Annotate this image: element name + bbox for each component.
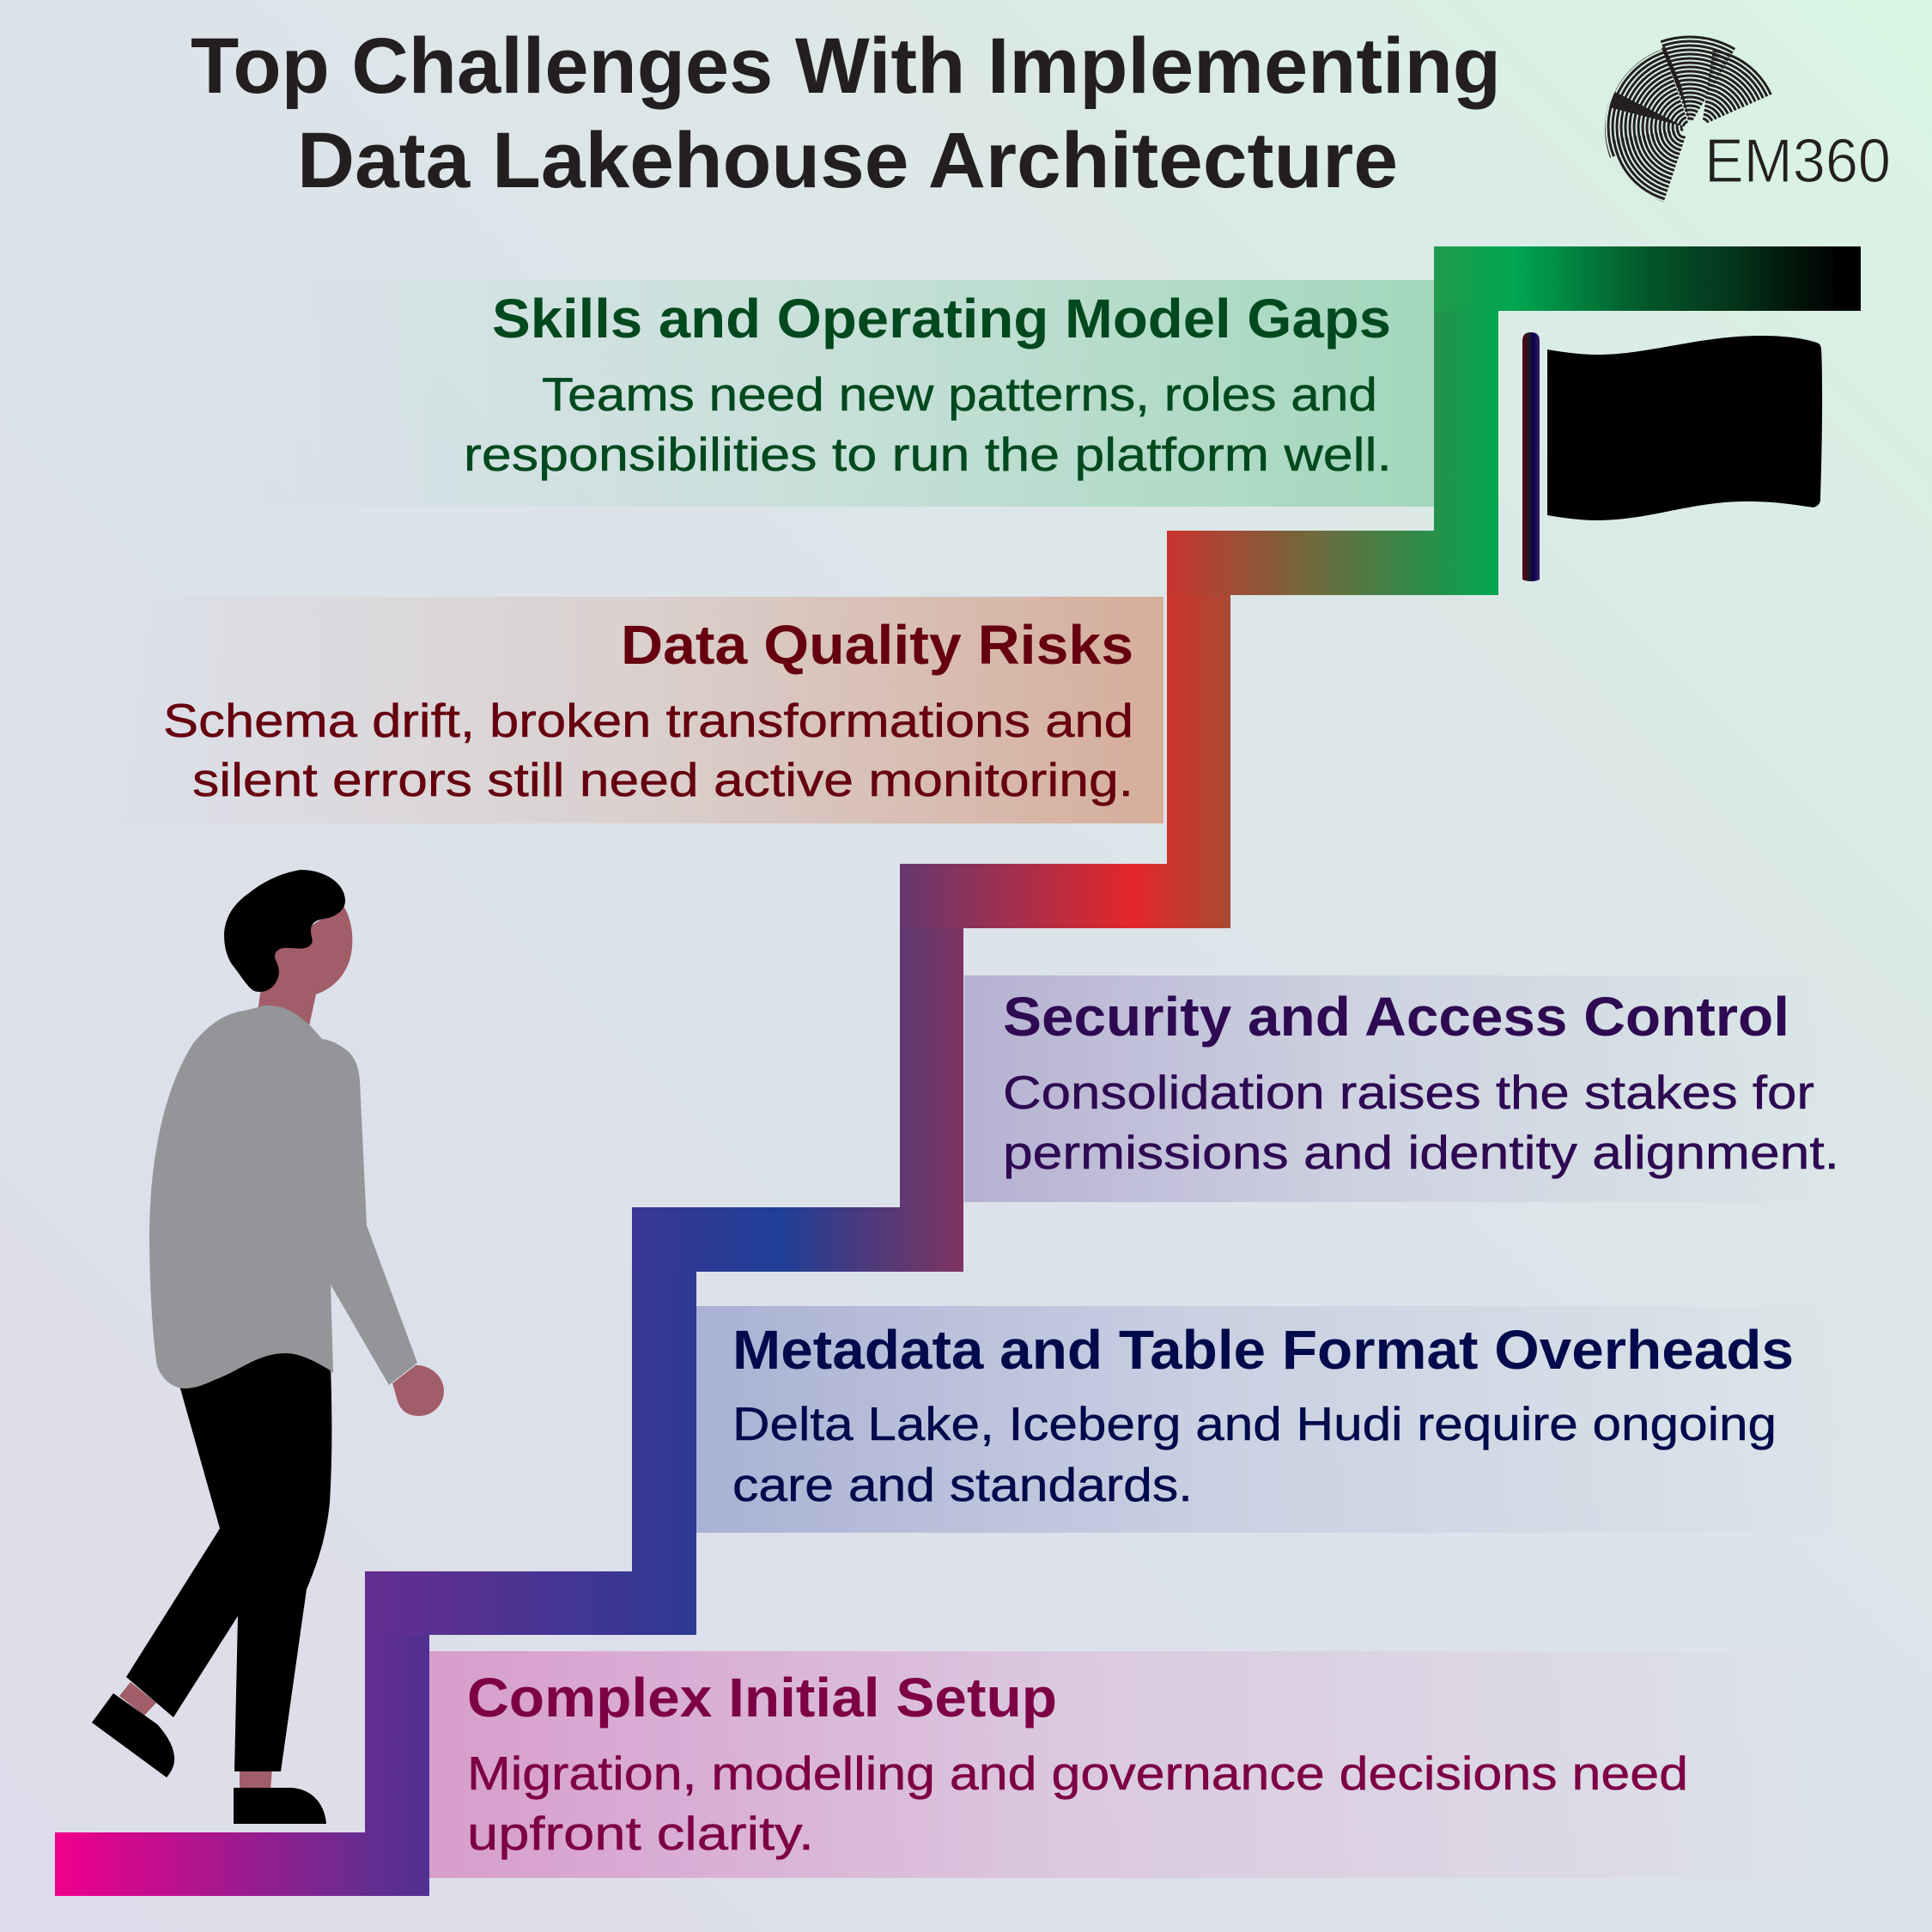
- panel: complex initial setup: upfront clarity.: [467, 1807, 814, 1860]
- panel: security and access control: permissions and identity alignment.: [1003, 1126, 1839, 1179]
- panel: complex initial setup: [429, 1651, 1846, 1878]
- staircase: [55, 246, 1861, 1896]
- panel: complex initial setup: Migration, modelling and governance decisions need: [467, 1747, 1688, 1800]
- icon: flag: [1522, 332, 1822, 581]
- panel: security and access control: [964, 975, 1846, 1202]
- panel: security and access control: Consolidation raises the stakes for: [1003, 1066, 1814, 1119]
- panel: data quality risks: Data Quality Risks: [621, 614, 1133, 676]
- title: [191, 22, 1501, 204]
- panel: skills and operating model gaps: Teams need new patterns, roles and: [542, 368, 1377, 421]
- panel: metadata and table format overheads: care and standards.: [732, 1458, 1193, 1511]
- panel: skills and operating model gaps: responsibilities to run the platform well.: [464, 428, 1392, 481]
- illustration: person walking up: [92, 870, 444, 1824]
- logo: EM360: EM360: [1704, 127, 1891, 196]
- panel: skills and operating model gaps: Skills and Operating Model Gaps: [492, 288, 1391, 349]
- panel: complex initial setup: Complex Initial Setup: [467, 1667, 1057, 1728]
- panel: security and access control: Security and Access Control: [1003, 986, 1789, 1048]
- title: Top Challenges With Implementing: [191, 22, 1501, 110]
- panel: metadata and table format overheads: [696, 1306, 1846, 1533]
- panel: data quality risks: Schema drift, broken transformations and: [163, 694, 1133, 747]
- title: Data Lakehouse Architecture: [297, 117, 1398, 204]
- panel: data quality risks: silent errors still need active monitoring.: [192, 753, 1133, 806]
- panel: skills and operating model gaps: [189, 280, 1434, 507]
- panel: data quality risks: [103, 597, 1163, 823]
- logo: EM360: [1604, 36, 1888, 203]
- panel: metadata and table format overheads: Metadata and Table Format Overheads: [732, 1319, 1794, 1381]
- panel: metadata and table format overheads: Delta Lake, Iceberg and Hudi require ongoing: [732, 1397, 1777, 1450]
